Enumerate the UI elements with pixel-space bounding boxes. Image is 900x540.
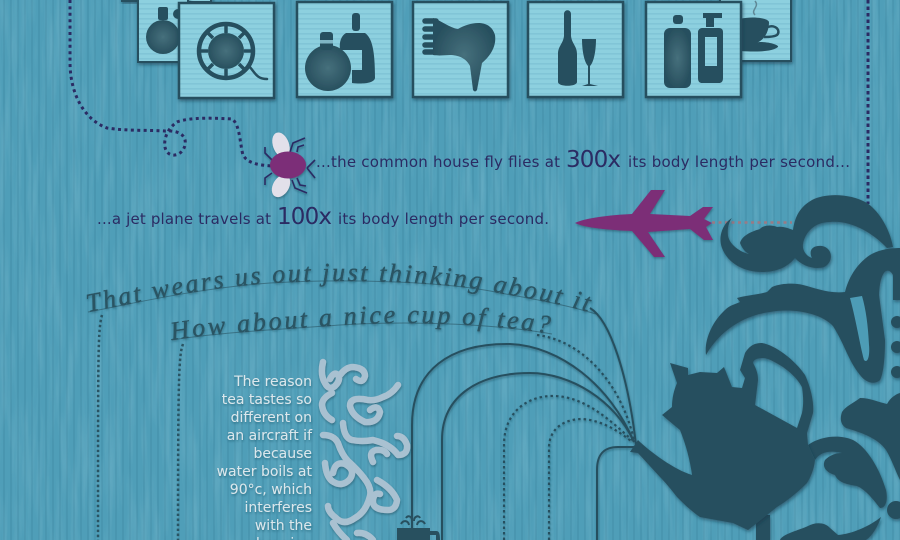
ornament: lower right leaves — [756, 393, 900, 540]
script heading: first line: That wears us out just thinking about it — [86, 264, 592, 314]
icon: jet plane — [575, 190, 713, 257]
partly hidden tiles at top — [121, 0, 211, 2]
dotted lines down the left — [98, 315, 183, 540]
text: why tea tastes different: because — [253, 446, 312, 462]
ornament: top right swirl — [706, 195, 900, 519]
dotted flight path of the fly — [70, 0, 272, 166]
tile: film reel — [179, 3, 274, 98]
ornament: pale scrollwork — [322, 362, 407, 540]
tile: toiletry bottles — [646, 2, 741, 97]
dashed line from plane to ornament — [712, 221, 792, 224]
tea pour lines from spout — [412, 308, 636, 540]
text: house fly speed — [316, 147, 850, 173]
tile: perfume bottles — [297, 2, 392, 97]
icon tiles row — [121, 0, 791, 98]
icon: teacup with splash — [397, 516, 440, 540]
text: house fly speed: ...the common house fly flies at — [316, 153, 560, 171]
text: why tea tastes different: water boils at — [217, 464, 313, 480]
text: jet plane speed: ...a jet plane travels at — [97, 210, 271, 228]
tile: hair dryer — [413, 2, 508, 97]
text: jet plane speed — [97, 204, 549, 230]
tile: wine bottle and glass — [528, 2, 623, 97]
script heading: second line: How about a nice cup of tea? — [171, 306, 552, 342]
text: why tea tastes different: tea tastes so — [222, 392, 312, 408]
text: why tea tastes different: with the — [255, 518, 312, 534]
text: why tea tastes different: 90°c, which — [230, 482, 312, 498]
text: jet plane speed: 100x — [277, 204, 332, 230]
tile: teacup behind — [720, 0, 791, 61]
text: why tea tastes different: an aircraft if — [227, 428, 313, 444]
text: house fly speed: its body length per second... — [628, 153, 850, 171]
text: why tea tastes different: interferes — [244, 500, 312, 516]
dotted line on the right edge — [866, 0, 870, 204]
tile: perfume behind — [138, 0, 188, 62]
text: why tea tastes different: different on — [231, 410, 312, 426]
icon: house fly — [265, 130, 315, 200]
text: why tea tastes different: The reason — [233, 374, 312, 390]
text: jet plane speed: its body length per second. — [338, 210, 549, 228]
ornament: large leaf right — [706, 248, 900, 383]
icon: teapot silhouette — [630, 343, 815, 530]
text: why tea tastes different — [217, 374, 313, 540]
text: house fly speed: 300x — [566, 147, 621, 173]
